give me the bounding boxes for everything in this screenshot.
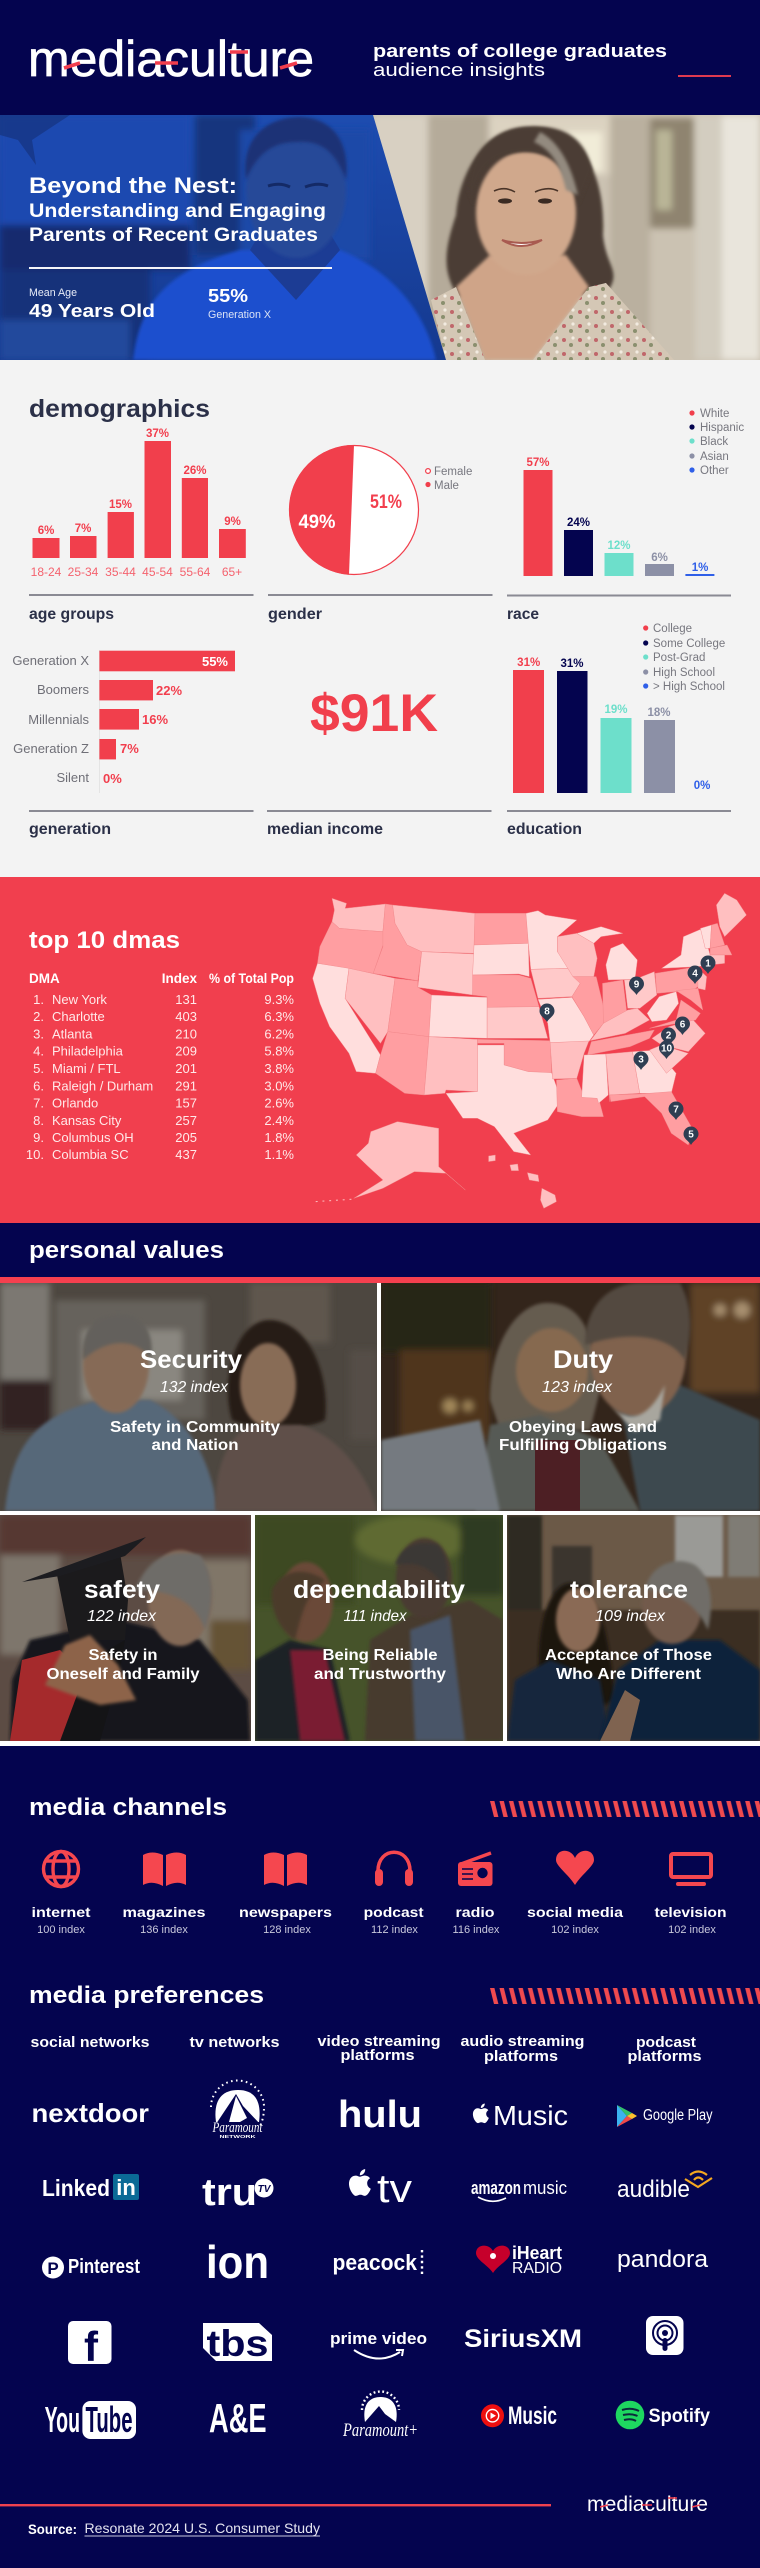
legend: race: Asian bbox=[700, 451, 729, 463]
table: top 10 dmas: % of Total Pop bbox=[209, 971, 294, 986]
column heading: video streaming platforms: video streaming bbox=[318, 2034, 440, 2050]
logo: Apple Podcasts bbox=[646, 2316, 684, 2355]
chart: age groups: 37% bbox=[146, 428, 169, 440]
stat: mean age: 49 Years Old bbox=[29, 300, 155, 321]
heading: media preferences: media preferences bbox=[29, 1982, 264, 2009]
text: safety: 122 index bbox=[87, 1608, 157, 1625]
chart: education: 31% bbox=[517, 657, 540, 669]
table: top 10 dmas: Atlanta bbox=[52, 1026, 93, 1042]
card: safety bbox=[0, 1515, 251, 1741]
text: safety: safety bbox=[84, 1576, 160, 1604]
map pins: 1 bbox=[705, 958, 711, 970]
chart: age groups: 15% bbox=[109, 499, 132, 511]
stat: generation X: 55% bbox=[208, 286, 248, 306]
text: dependability: and Trustworthy bbox=[314, 1666, 446, 1683]
table: top 10 dmas: Orlando bbox=[52, 1096, 98, 1110]
label: age groups: age groups bbox=[29, 606, 114, 623]
card: tolerance bbox=[507, 1515, 760, 1741]
logo: Facebook bbox=[68, 2321, 112, 2370]
table: top 10 dmas: 4. bbox=[33, 1044, 44, 1059]
table: top 10 dmas: 201 bbox=[175, 1061, 197, 1076]
chart: age groups: 26% bbox=[183, 465, 207, 477]
panel: demographics bbox=[0, 360, 760, 878]
column heading: podcast platforms: platforms bbox=[628, 2049, 702, 2065]
chart: gender pie bbox=[289, 445, 472, 575]
panel: personal values bbox=[0, 1223, 760, 1746]
channel: podcast bbox=[364, 1852, 424, 1936]
chart: generation: 7% bbox=[120, 741, 139, 756]
channel: social media: 102 index bbox=[551, 1924, 599, 1936]
label: median income: median income bbox=[267, 821, 383, 838]
logo: Pinterest: P bbox=[47, 2259, 59, 2278]
chart: age groups: 9% bbox=[224, 516, 241, 528]
panel: media channels bbox=[0, 1746, 760, 2568]
channel: radio: radio bbox=[456, 1904, 494, 1920]
text: security: Security bbox=[140, 1346, 242, 1374]
chart: generation: Generation Z bbox=[13, 741, 89, 756]
table: top 10 dmas: 2. bbox=[33, 1009, 44, 1024]
logo: truTV: TV bbox=[258, 2184, 272, 2195]
text: tolerance: tolerance bbox=[570, 1576, 688, 1604]
stat: mean age bbox=[29, 287, 155, 321]
text: safety: Safety in bbox=[88, 1647, 158, 1664]
hero headline bbox=[29, 173, 326, 246]
logo: audible: audible bbox=[617, 2176, 690, 2203]
table: top 10 dmas: 9. bbox=[33, 1130, 44, 1145]
logo: mediaculture: mediaculture bbox=[28, 31, 314, 87]
logo: Paramount Network: Paramount bbox=[212, 2120, 263, 2136]
map pins: 6 bbox=[680, 1020, 686, 1030]
chart: race: 57% bbox=[526, 457, 550, 469]
text: security bbox=[110, 1346, 280, 1454]
map: united states bbox=[313, 893, 746, 1208]
logo: Paramount+ bbox=[342, 2392, 418, 2441]
legend: education: > High School bbox=[653, 681, 725, 693]
stat: generation X: Generation X bbox=[208, 309, 272, 321]
channel: television bbox=[654, 1854, 726, 1936]
logo: hulu: hulu bbox=[338, 2094, 422, 2136]
header band bbox=[0, 0, 760, 115]
table: top 10 dmas: Columbus OH bbox=[52, 1130, 134, 1145]
stat: median income: $91K bbox=[310, 684, 438, 743]
chart: education: 19% bbox=[604, 704, 628, 716]
table: top 10 dmas: Philadelphia bbox=[52, 1044, 124, 1059]
logo: Spotify bbox=[616, 2401, 710, 2429]
channel: newspapers: newspapers bbox=[239, 1904, 332, 1920]
chart: age groups: 18-24 bbox=[31, 565, 62, 579]
column heading: audio streaming platforms bbox=[460, 2034, 584, 2065]
logo: iHeartRadio bbox=[476, 2243, 562, 2277]
panel: top 10 dmas bbox=[0, 877, 760, 1223]
channel: internet: 100 index bbox=[37, 1924, 85, 1936]
channel: social media bbox=[527, 1851, 623, 1936]
table: top 10 dmas bbox=[26, 971, 294, 1162]
label: race: race bbox=[507, 606, 539, 623]
table: top 10 dmas: 205 bbox=[175, 1130, 197, 1145]
legend: education: Post-Grad bbox=[653, 652, 705, 664]
logo: SiriusXM: SiriusXM bbox=[464, 2325, 582, 2353]
column heading: video streaming platforms: platforms bbox=[340, 2048, 414, 2064]
source line: Source: bbox=[28, 2522, 77, 2537]
table: top 10 dmas: 1. bbox=[33, 992, 44, 1007]
chart: generation: Silent bbox=[56, 770, 89, 785]
channel: podcast: 112 index bbox=[371, 1924, 418, 1936]
hero headline: Understanding and Engaging bbox=[29, 201, 326, 222]
table: top 10 dmas: 2.6% bbox=[264, 1096, 294, 1110]
table: top 10 dmas: 3.0% bbox=[264, 1078, 294, 1094]
table: top 10 dmas: 7. bbox=[33, 1096, 44, 1110]
chart: race bbox=[524, 457, 714, 576]
logo: amazon music: music bbox=[523, 2178, 567, 2198]
logo: Facebook: f bbox=[84, 2323, 99, 2370]
chart: generation: 55% bbox=[202, 654, 228, 669]
logo: ion: ion bbox=[206, 2236, 269, 2288]
chart: education: 31% bbox=[560, 658, 584, 670]
table: top 10 dmas: New York bbox=[52, 992, 107, 1007]
logo: Spotify: Spotify bbox=[648, 2406, 710, 2427]
chart: gender pie: Female bbox=[434, 466, 472, 478]
table: top 10 dmas: Index bbox=[162, 971, 197, 986]
text: dependability: 111 index bbox=[344, 1608, 407, 1625]
table: top 10 dmas: Charlotte bbox=[52, 1009, 105, 1024]
table: top 10 dmas: 5. bbox=[33, 1061, 44, 1076]
table: top 10 dmas: 209 bbox=[175, 1044, 197, 1059]
text: safety bbox=[46, 1576, 200, 1683]
logo: pandora: pandora bbox=[617, 2246, 709, 2273]
chart: education: 0% bbox=[694, 780, 710, 792]
channel: radio: 116 index bbox=[453, 1924, 500, 1936]
logo: iHeartRadio: RADIO bbox=[512, 2260, 562, 2277]
text: duty: 123 index bbox=[542, 1379, 613, 1396]
chart: age groups: 55-64 bbox=[180, 565, 211, 579]
logo: Paramount Network bbox=[211, 2080, 264, 2139]
logo: peacock: peacock bbox=[332, 2250, 418, 2275]
map pins: 10 bbox=[661, 1044, 672, 1054]
chart: race: 6% bbox=[651, 552, 668, 564]
table: top 10 dmas: 6.3% bbox=[264, 1009, 294, 1024]
table: top 10 dmas: Raleigh / Durham bbox=[52, 1078, 153, 1094]
text: duty: Fulfilling Obligations bbox=[499, 1437, 667, 1454]
table: top 10 dmas: 8. bbox=[33, 1113, 44, 1128]
table: top 10 dmas: Columbia SC bbox=[52, 1147, 129, 1162]
card: dependability bbox=[255, 1515, 503, 1741]
table: top 10 dmas: 3.8% bbox=[264, 1061, 294, 1076]
text: dependability: Being Reliable bbox=[322, 1647, 438, 1664]
heading: top 10 dmas: top 10 dmas bbox=[29, 927, 180, 954]
hero headline: Parents of Recent Graduates bbox=[29, 225, 318, 246]
table: top 10 dmas: 1.8% bbox=[264, 1130, 294, 1145]
table: top 10 dmas: 6.2% bbox=[264, 1026, 294, 1042]
logo: YouTube: You bbox=[45, 2399, 80, 2440]
legend: race: Hispanic bbox=[700, 422, 744, 434]
chart: gender pie: 51% bbox=[370, 492, 402, 513]
text: safety: Oneself and Family bbox=[46, 1666, 200, 1683]
chart: age groups: 25-34 bbox=[68, 565, 99, 579]
logo: prime video bbox=[330, 2329, 427, 2359]
source line: Resonate 2024 U.S. Consumer Study bbox=[84, 2520, 320, 2536]
text: duty: Obeying Laws and bbox=[509, 1419, 657, 1436]
legend: race: Black bbox=[700, 436, 728, 448]
legend: education: College bbox=[653, 623, 692, 635]
logo: amazon music: amazon bbox=[471, 2178, 521, 2198]
legend: race bbox=[689, 408, 744, 477]
chart: age groups: 6% bbox=[38, 525, 54, 537]
channel: television: television bbox=[654, 1904, 726, 1920]
column heading: podcast platforms: podcast bbox=[636, 2035, 696, 2051]
channel: newspapers bbox=[239, 1852, 332, 1936]
column heading: video streaming platforms bbox=[318, 2034, 440, 2064]
logo: audible bbox=[617, 2172, 712, 2203]
hero headline: Beyond the Nest: bbox=[29, 173, 237, 198]
chart: age groups: 65+ bbox=[222, 565, 242, 579]
label: generation: generation bbox=[29, 821, 111, 838]
footer bbox=[0, 2493, 708, 2537]
table: top 10 dmas: DMA bbox=[29, 971, 60, 986]
logo: Apple TV: tv bbox=[377, 2167, 412, 2211]
table: top 10 dmas: 3. bbox=[33, 1026, 44, 1042]
logo: Paramount Network: NETWORK bbox=[220, 2134, 257, 2139]
table: top 10 dmas: 10. bbox=[26, 1147, 44, 1162]
text: security: Safety in Community bbox=[110, 1419, 280, 1436]
map pins: 9 bbox=[634, 980, 640, 990]
table: top 10 dmas: 437 bbox=[175, 1147, 197, 1162]
channel: internet: internet bbox=[32, 1904, 91, 1920]
logo: LinkedIn: in bbox=[116, 2175, 136, 2200]
logo: Paramount+: Paramount+ bbox=[342, 2420, 418, 2441]
map pins: 2 bbox=[666, 1030, 672, 1042]
logo: iHeartRadio: iHeart bbox=[512, 2243, 562, 2263]
channel: magazines: magazines bbox=[122, 1904, 206, 1920]
text: tolerance bbox=[545, 1576, 712, 1683]
photo: woman at home bbox=[360, 115, 760, 360]
card: duty bbox=[381, 1283, 760, 1511]
card: security bbox=[0, 1283, 377, 1511]
table: top 10 dmas: 157 bbox=[175, 1096, 197, 1110]
header title: audience insights bbox=[373, 60, 545, 80]
logo: YouTube Music bbox=[481, 2402, 557, 2430]
text: duty bbox=[499, 1346, 667, 1454]
label: education: education bbox=[507, 821, 582, 838]
text: security: and Nation bbox=[152, 1437, 238, 1454]
legend: race: Other bbox=[700, 465, 729, 477]
chart: generation bbox=[12, 650, 235, 793]
channel: radio bbox=[453, 1853, 500, 1936]
header title bbox=[373, 41, 667, 80]
column heading: audio streaming platforms: audio streaming bbox=[460, 2034, 584, 2050]
table: top 10 dmas: 291 bbox=[175, 1078, 197, 1094]
channel: social media: social media bbox=[527, 1904, 623, 1920]
panel: media preferences bbox=[29, 1982, 760, 2441]
stat: generation X bbox=[208, 286, 272, 321]
text: tolerance: Who Are Different bbox=[556, 1666, 702, 1683]
text: duty: Duty bbox=[553, 1346, 613, 1374]
chart: race: 24% bbox=[567, 517, 590, 529]
chart: age groups: 35-44 bbox=[105, 565, 136, 579]
channel: podcast: podcast bbox=[364, 1904, 424, 1920]
text: dependability bbox=[293, 1576, 465, 1683]
chart: generation: Boomers bbox=[37, 682, 89, 697]
map pins: 5 bbox=[688, 1130, 694, 1140]
logo: YouTube: Tube bbox=[86, 2399, 132, 2440]
channel: magazines bbox=[122, 1852, 206, 1936]
map pins: 3 bbox=[638, 1054, 644, 1066]
text: dependability: dependability bbox=[293, 1576, 465, 1604]
legend: education: Some College bbox=[653, 638, 725, 650]
channel: newspapers: 128 index bbox=[263, 1924, 311, 1936]
chart: gender pie: Male bbox=[434, 480, 459, 492]
chart: generation: Generation X bbox=[12, 653, 89, 668]
heading: media channels: media channels bbox=[29, 1794, 227, 1821]
logo: LinkedIn: Linked bbox=[42, 2175, 110, 2201]
column heading: tv networks: tv networks bbox=[190, 2035, 280, 2051]
logo: Google Play bbox=[617, 2105, 713, 2127]
map pins: 8 bbox=[544, 1006, 550, 1018]
table: top 10 dmas: 5.8% bbox=[264, 1044, 294, 1059]
table: top 10 dmas: 2.4% bbox=[264, 1113, 294, 1128]
photo: man under blue overlay bbox=[0, 115, 446, 360]
chart: generation: 16% bbox=[142, 712, 168, 727]
logo: truTV: tru bbox=[202, 2172, 257, 2214]
chart: generation: 22% bbox=[156, 683, 182, 698]
chart: generation: 0% bbox=[103, 771, 122, 786]
legend: education bbox=[643, 623, 725, 693]
logo: Google Play: Google Play bbox=[643, 2107, 713, 2124]
chart: education: 18% bbox=[647, 707, 671, 719]
text: tolerance: 109 index bbox=[595, 1608, 666, 1625]
chart: race: 12% bbox=[607, 540, 631, 552]
stat: mean age: Mean Age bbox=[29, 287, 77, 299]
channel: magazines: 136 index bbox=[140, 1924, 188, 1936]
chart: race: 1% bbox=[692, 562, 708, 574]
chart: age groups: 7% bbox=[75, 523, 91, 535]
table: top 10 dmas: 257 bbox=[175, 1113, 197, 1128]
logo: prime video: prime video bbox=[330, 2329, 427, 2348]
table: top 10 dmas: 1.1% bbox=[264, 1147, 294, 1162]
channel: television: 102 index bbox=[668, 1924, 716, 1936]
column heading: podcast platforms bbox=[628, 2035, 702, 2065]
logo: Pinterest bbox=[42, 2256, 140, 2278]
table: top 10 dmas: 6. bbox=[33, 1078, 44, 1094]
legend: education: High School bbox=[653, 667, 715, 679]
header title: parents of college graduates bbox=[373, 41, 667, 61]
table: top 10 dmas: 210 bbox=[175, 1026, 197, 1042]
legend: race: White bbox=[700, 408, 729, 420]
map pins: 7 bbox=[673, 1104, 679, 1116]
logo: amazon music bbox=[471, 2178, 567, 2201]
logo: footer mediaculture: mediaculture bbox=[587, 2493, 708, 2516]
logo: Apple Music: Music bbox=[493, 2100, 568, 2131]
chart: generation: Millennials bbox=[28, 712, 89, 727]
logo: Pinterest: Pinterest bbox=[68, 2256, 140, 2278]
chart: age groups bbox=[31, 428, 246, 579]
heading: personal values: personal values bbox=[29, 1237, 224, 1264]
logo: YouTube Music: Music bbox=[508, 2402, 557, 2430]
column heading: audio streaming platforms: platforms bbox=[484, 2049, 558, 2065]
logo: A&E: A&E bbox=[209, 2395, 267, 2441]
channel: internet bbox=[32, 1852, 91, 1936]
map pins bbox=[540, 956, 716, 1145]
column heading: social networks: social networks bbox=[30, 2035, 150, 2051]
logo: Apple TV bbox=[349, 2167, 412, 2211]
table: top 10 dmas: 403 bbox=[175, 1009, 197, 1024]
text: security: 132 index bbox=[160, 1379, 229, 1396]
chart: age groups: 45-54 bbox=[142, 565, 173, 579]
heading: demographics: demographics bbox=[29, 395, 210, 423]
logo: tbs: tbs bbox=[206, 2323, 268, 2364]
table: top 10 dmas: 131 bbox=[175, 992, 197, 1007]
map pins: 4 bbox=[692, 968, 698, 980]
table: top 10 dmas: 9.3% bbox=[264, 992, 294, 1007]
chart: gender pie: 49% bbox=[298, 512, 336, 533]
hero photo panel bbox=[0, 115, 760, 360]
logo: nextdoor: nextdoor bbox=[32, 2098, 149, 2128]
label: gender: gender bbox=[268, 606, 322, 623]
text: tolerance: Acceptance of Those bbox=[545, 1647, 712, 1664]
table: top 10 dmas: Kansas City bbox=[52, 1113, 122, 1128]
table: top 10 dmas: Miami / FTL bbox=[52, 1061, 121, 1076]
chart: education bbox=[513, 657, 710, 793]
